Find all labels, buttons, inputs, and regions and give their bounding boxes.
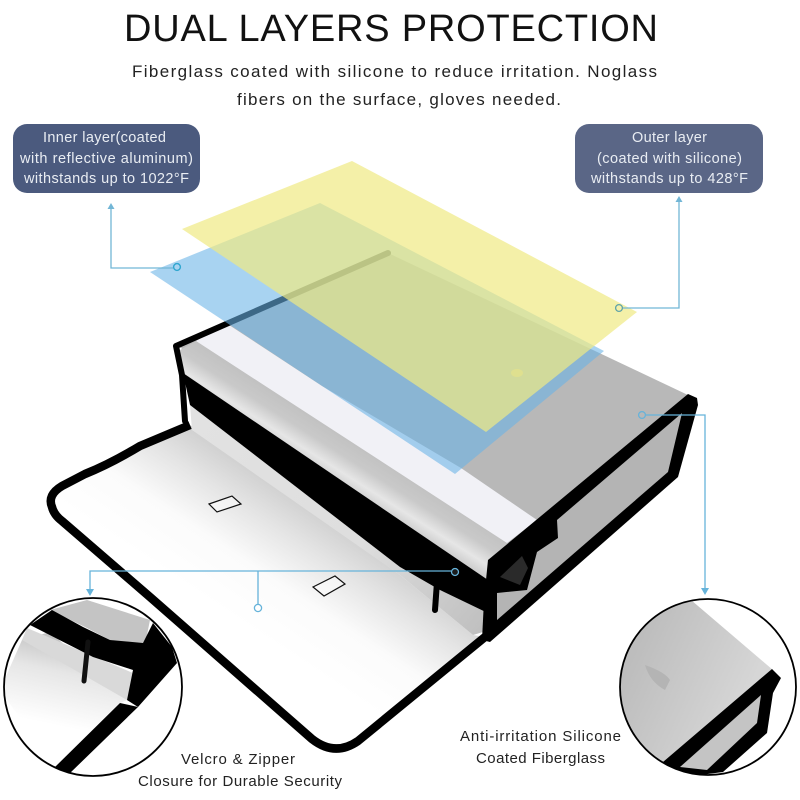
arrow: silicone surface to lens [639,412,709,595]
lens black binding [663,669,781,775]
callout box: inner layer [13,124,200,193]
lens flap interior [5,633,126,718]
callout box: outer layer: withstands up to 428°F [590,171,748,187]
lens inner panel [680,695,761,770]
bag lower zipper strip [190,405,490,635]
bag right side black binding [482,394,698,642]
title: DUAL LAYERS PROTECTION [124,8,658,50]
subtitle text [132,62,657,109]
lens black binding [30,610,177,707]
bag white strip [196,323,537,543]
callout box: outer layer: Outer layer [632,130,707,146]
bag flap [51,425,485,749]
subtitle text: Fiberglass coated with silicone to reduce irritation. Noglass [132,62,657,81]
zipper pull [435,582,437,610]
yellow outer layer sheet [182,161,637,432]
lens gray outer surface [50,600,150,645]
lens fabric fold [645,665,670,690]
product illustration: fire-safe bag [51,253,698,749]
subtitle text: fibers on the surface, gloves needed. [237,90,561,109]
callout box: inner layer: with reflective aluminum) [19,151,193,167]
caption: silicone coated fiberglass: Coated Fiberglass [476,750,605,767]
lens gray fabric [610,600,773,762]
yellow spot on sheet [511,369,523,377]
black zipper band [183,373,492,615]
arrow: inner layer to box [108,203,180,270]
zipper slider [500,556,528,585]
bag front fold [180,341,507,582]
arrow: outer layer to box [616,196,682,311]
icon: velcro patch upper [209,496,241,512]
caption: velcro and zipper [138,751,342,790]
caption: silicone coated fiberglass [460,728,621,767]
lens right gusset [147,630,170,680]
caption: silicone coated fiberglass: Anti-irritation Silicone [460,728,621,745]
caption: velcro and zipper: Closure for Durable Security [138,773,342,790]
blue inner layer sheet [150,203,604,474]
caption: velcro and zipper: Velcro & Zipper [181,751,295,768]
callout box: outer layer: (coated with silicone) [597,151,742,167]
lens zipper pull [84,642,88,681]
bag top face [178,253,688,560]
arrow: zipper and velcro to lens [86,568,458,612]
detail lens: velcro and zipper [0,598,182,776]
detail lens: silicone surface [610,599,796,775]
callout box: inner layer: Inner layer(coated [43,130,166,146]
icon: velcro patch lower [313,576,345,596]
bag right side panel [497,413,682,620]
callout box: outer layer [575,124,763,193]
callout box: inner layer: withstands up to 1022°F [23,171,189,187]
lens black diagonal edge [55,703,138,775]
black rear and left edge binding [176,253,388,421]
lens light strip [22,628,133,700]
